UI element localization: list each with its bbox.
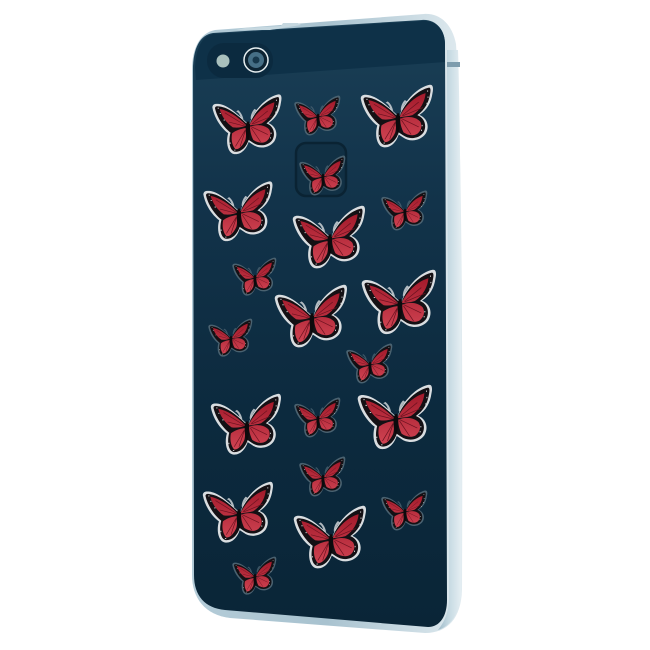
phone case: clear outer shell: [192, 14, 462, 633]
side seam: [447, 62, 460, 67]
flash: [216, 54, 230, 68]
side highlight on right edge: [438, 50, 462, 630]
phone back panel: [193, 20, 447, 627]
top band of the phone back: [195, 21, 445, 80]
top edge buttons: [236, 23, 301, 30]
camera module: [207, 43, 273, 78]
butterflies, small: [208, 96, 427, 595]
camera lens: [244, 48, 268, 72]
fingerprint recess: [296, 143, 346, 196]
butterflies, large: [203, 85, 436, 568]
camera recess: [207, 43, 273, 78]
